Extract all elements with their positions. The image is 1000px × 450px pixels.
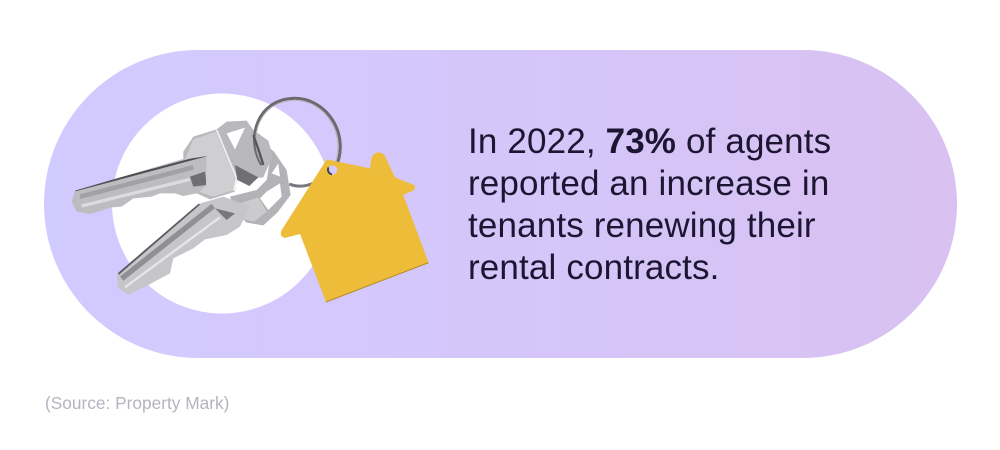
icon: front key — [70, 121, 273, 217]
white circle — [112, 94, 332, 314]
source note: (Source: Property Mark) — [45, 393, 229, 413]
text block: main statistic — [468, 122, 831, 287]
icon: back key — [113, 137, 291, 300]
illustration: keys with house keyring — [72, 94, 429, 314]
text block: main statistic: reported an increase in — [468, 164, 829, 203]
icon: yellow house key fob — [281, 152, 429, 302]
icon: metal split ring — [253, 98, 340, 186]
text block: main statistic: tenants renewing their — [468, 206, 816, 245]
text block: main statistic: In 2022, 73% of agents — [468, 122, 831, 161]
panel: lilac pill background — [44, 50, 957, 358]
text block: main statistic: rental contracts. — [468, 248, 720, 287]
